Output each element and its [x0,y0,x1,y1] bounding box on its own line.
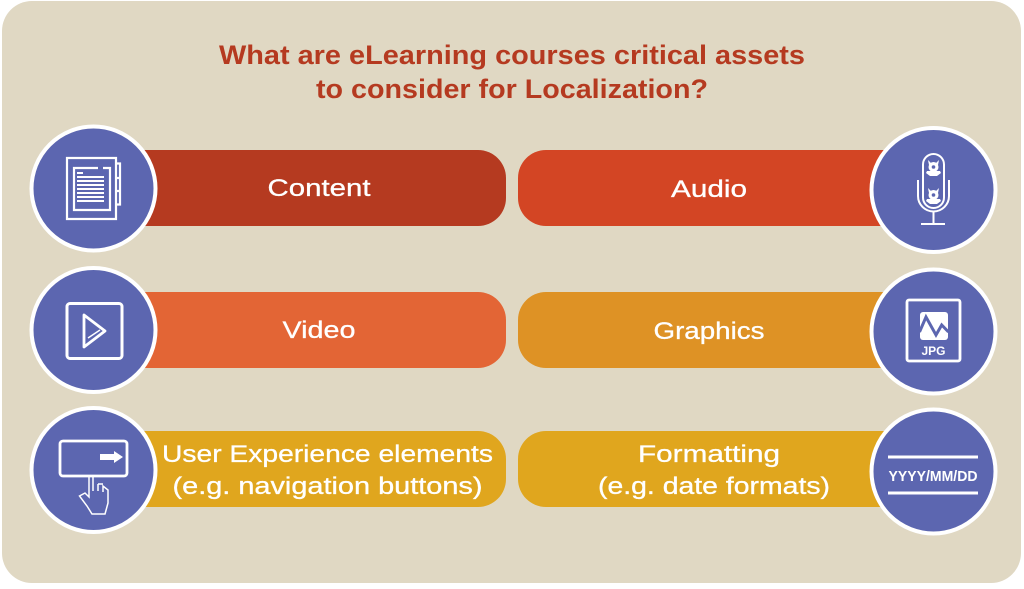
icon: microphone [872,128,996,252]
icon: content document [32,126,156,250]
bar: Formatting: Formatting [638,441,780,468]
bar: Formatting: (e.g. date formats) [598,473,830,500]
bar: Content: Content [268,175,371,202]
bar: Video [120,292,506,368]
icon: button with cursor [32,408,156,532]
icon: JPG image file: JPG [921,344,946,358]
bar: User Experience elements: User Experience elements [162,441,493,468]
title [219,40,805,104]
bar: Video: Video [282,317,356,344]
bar: Content [120,150,506,226]
bar: Audio: Audio [671,176,747,203]
bar: User Experience elements [120,431,506,507]
bar: Audio [518,150,900,226]
title: What are eLearning courses critical assets [219,40,805,70]
bar: Formatting [518,431,900,507]
title: to consider for Localization? [316,74,708,104]
bar: Graphics: Graphics [654,318,764,345]
icon: date format [872,410,996,534]
icon: date format: YYYY/MM/DD [888,468,978,485]
bar: User Experience elements: (e.g. navigation buttons) [172,473,482,500]
bar: Graphics [518,292,900,368]
icon: JPG image file [872,270,996,394]
icon: video play [32,268,156,392]
